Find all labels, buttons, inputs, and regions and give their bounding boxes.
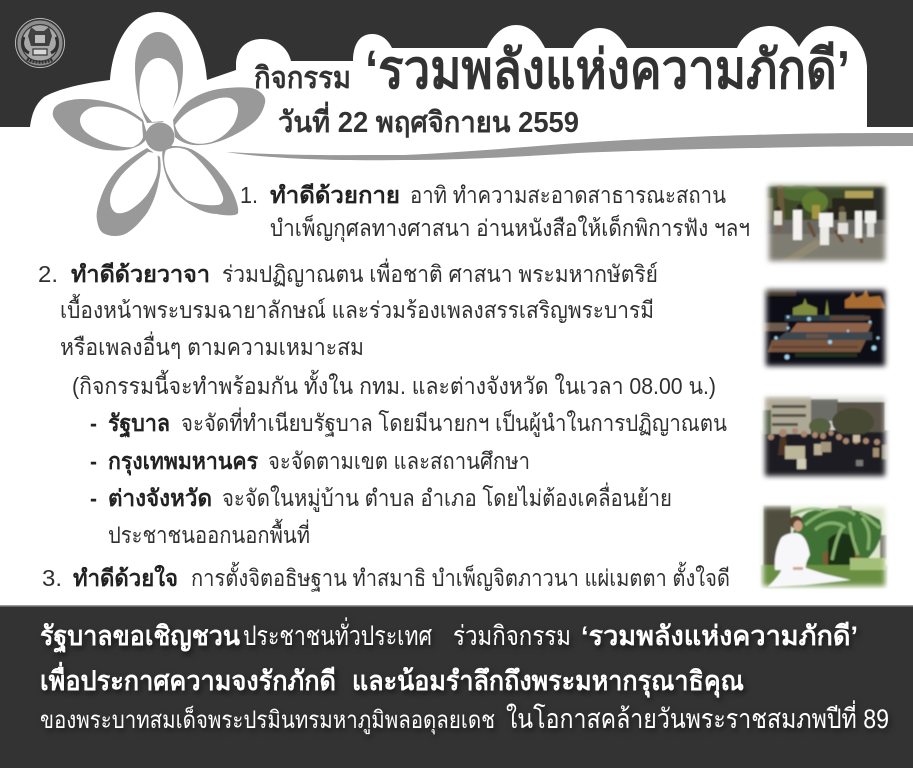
photo: night crowd at Sanam Luang — [760, 282, 892, 372]
item 1: อาทิ ทำความสะอาดสาธารณะสถาน — [410, 182, 726, 208]
item 2: 2. — [38, 261, 58, 287]
petal: upper left — [53, 99, 148, 151]
footer line 1: ร่วมกิจกรรม — [453, 621, 571, 651]
sub-item: Bangkok: จะจัดตามเขต และสถานศึกษา — [268, 448, 530, 474]
sub-item: government: รัฐบาล — [108, 410, 170, 438]
sub-item: provinces: ประชาชนออกนอกพื้นที่ — [108, 519, 310, 548]
petal: upper right — [173, 87, 265, 145]
item 2: เบื้องหน้าพระบรมฉายาลักษณ์ และร่วมร้องเพลงสรรเสริญพระบารมี — [60, 294, 654, 323]
sub-item: government — [90, 407, 727, 438]
sub-item: Bangkok: กรุงเทพมหานคร — [108, 448, 259, 476]
footer line 1: รัฐบาลขอเชิญชวน — [40, 621, 241, 654]
footer line 2: เพื่อประกาศความจงรักภักดี — [40, 661, 336, 696]
footer line 1: ประชาชนทั่วประเทศ — [243, 617, 432, 651]
photo: woman meditating — [760, 504, 888, 590]
grey swoosh under header — [226, 133, 913, 160]
photo: people sweeping — [762, 178, 890, 268]
flower centre — [146, 122, 174, 152]
icon: five-petal flower — [53, 32, 265, 236]
footer line 1: ‘รวมพลังแห่งความภักดี’ — [581, 621, 858, 651]
footer line 2 — [40, 661, 744, 698]
footer line 3 — [40, 700, 889, 735]
petal: lower left — [97, 148, 161, 236]
item 3 — [42, 562, 730, 592]
title prefix: กิจกรรม — [254, 62, 351, 95]
title — [254, 40, 850, 139]
item 3: 3. — [42, 565, 62, 591]
item 1 — [240, 182, 750, 242]
sub-item: Bangkok — [90, 448, 530, 476]
activity list — [38, 182, 750, 592]
petal: lower right — [162, 146, 238, 215]
item 2 — [38, 258, 658, 360]
sub-item: provinces: - — [90, 485, 97, 511]
title main: ‘รวมพลังแห่งความภักดี’ — [365, 40, 850, 100]
sub-item: provinces: ต่างจังหวัด — [108, 485, 212, 511]
footer line 1 — [40, 617, 858, 654]
item 1: 1. — [240, 182, 258, 208]
sub-item: provinces: จะจัดในหมู่บ้าน ตำบล อำเภอ โดยไม่ต้องเคลื่อนย้าย — [222, 482, 672, 512]
sub-item: government: - — [90, 410, 97, 436]
footer line 2: และน้อมรำลึกถึงพระมหากรุณาธิคุณ — [352, 666, 744, 698]
footer line 3: ของพระบาทสมเด็จพระปรมินทรมหาภูมิพลอดุลยเดช — [40, 705, 495, 735]
petal: top — [135, 32, 183, 123]
sub-item: Bangkok: - — [90, 448, 97, 474]
time note: (กิจกรรมนี้จะทำพร้อมกัน ทั้งใน กทม. และต่างจังหวัด ในเวลา 08.00 น.) — [72, 370, 716, 399]
item 3: ทำดีด้วยใจ — [73, 564, 178, 591]
header dark band with scalloped edge — [0, 0, 913, 127]
item 2: ทำดีด้วยวาจา — [71, 261, 210, 287]
icon: government seal — [15, 18, 65, 68]
photo: crowd holding portraits — [760, 390, 892, 482]
item 2: ร่วมปฏิญาณตน เพื่อชาติ ศาสนา พระมหากษัตริย์ — [222, 258, 658, 287]
item 1: ทำดีด้วยกาย — [270, 182, 400, 208]
sub-item: government: จะจัดที่ทำเนียบรัฐบาล โดยมีนายกฯ เป็นผู้นำในการปฏิญาณตน — [181, 407, 727, 437]
sub-item: provinces — [90, 482, 672, 548]
item 3: การตั้งจิตอธิษฐาน ทำสมาธิ บำเพ็ญจิตภาวนา แผ่เมตตา ตั้งใจดี — [191, 562, 730, 592]
item 1: บำเพ็ญกุศลทางศาสนา อ่านหนังสือให้เด็กพิการฟัง ฯลฯ — [270, 213, 750, 242]
date: วันที่ 22 พฤศจิกายน 2559 — [278, 101, 579, 139]
footer panel — [0, 605, 913, 768]
item 2: หรือเพลงอื่นๆ ตามความเหมาะสม — [60, 331, 364, 360]
